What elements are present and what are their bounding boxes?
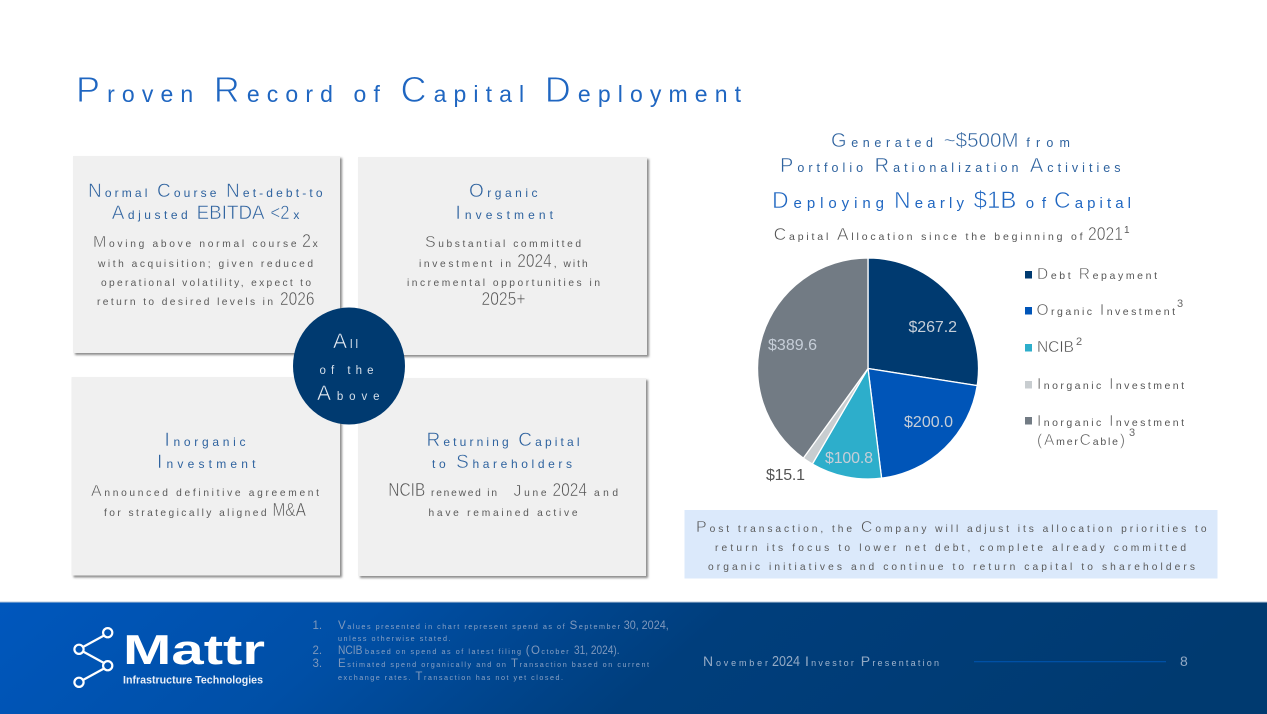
heading: returning capital: R eturning C apital	[426, 430, 580, 451]
legend: NCIB: NCIB	[1037, 339, 1074, 356]
callout: post transaction priorities: organic initiatives and continue to return capital to shareholders	[708, 562, 1195, 573]
chart title: 1	[1124, 225, 1130, 236]
text: normal course body: operational volatility, expect to	[101, 278, 311, 289]
footnotes: Estimated spend organically and on Transaction based on current	[338, 658, 649, 670]
badge: all of the above	[293, 308, 405, 424]
logo: Mattr: Mattr	[123, 626, 265, 673]
text: returning capital body: and	[594, 488, 618, 499]
slice: organic investment	[868, 368, 977, 478]
text: organic investment body	[407, 234, 600, 309]
badge: all of the above: A bove	[317, 382, 380, 405]
pie value labels: $267.2	[908, 319, 957, 336]
text: inorganic investment body: M&A	[272, 500, 306, 520]
badge: all of the above: of the	[320, 365, 374, 377]
text: returning capital body	[388, 480, 618, 519]
footnotes: NCIB	[338, 643, 362, 657]
heading: inorganic investment: I norganic	[164, 430, 246, 451]
heading: normal course	[88, 181, 323, 224]
legend: inorganic investment AmerCable: Inorganic Investment	[1037, 413, 1184, 430]
footnotes: unless otherwise stated.	[338, 634, 450, 643]
text: normal course body: M oving above normal course	[93, 234, 297, 251]
footer presentation label: 2024	[772, 654, 800, 670]
legend: inorganic investment AmerCable	[1025, 413, 1184, 449]
pie value labels: $200.0	[904, 414, 953, 431]
slice: inorganic investment	[803, 368, 868, 464]
footer presentation label: N ovember	[703, 653, 768, 669]
legend: organic investment: 3	[1177, 298, 1183, 310]
slice: debt repayment	[868, 258, 979, 386]
footer presentation label	[703, 653, 939, 670]
chart title: 2021	[1088, 224, 1123, 244]
footnotes: 2.	[312, 645, 322, 657]
heading: generated from portfolio rationalization: from	[1026, 136, 1070, 150]
logo: Mattr	[74, 626, 265, 687]
text: normal course body: x	[313, 239, 318, 250]
footnotes: 3.	[312, 658, 322, 670]
pie chart: capital allocation	[758, 258, 979, 479]
heading: returning capital	[426, 430, 580, 473]
text: inorganic investment body	[91, 483, 319, 520]
icon: network nodes	[74, 628, 112, 687]
callout: post transaction priorities	[684, 510, 1218, 578]
heading: normal course: N ormal C ourse N et-debt-to	[88, 181, 323, 202]
footnotes	[312, 618, 669, 683]
legend: inorganic investment AmerCable: (AmerCable)	[1037, 432, 1125, 449]
pie value labels: $389.6	[768, 337, 817, 354]
footnotes: 30, 2024,	[624, 618, 669, 632]
callout: post transaction priorities: return its focus to lower net debt, complete already committed	[715, 543, 1186, 554]
panel: inorganic investment	[72, 377, 340, 576]
heading: normal course: <2	[270, 203, 290, 224]
page number: 8	[1180, 653, 1188, 669]
text: returning capital body: 2024	[552, 480, 587, 500]
footnotes: 31, 2024).	[574, 643, 620, 657]
legend: NCIB: 2	[1076, 336, 1082, 348]
footnotes: exchange rates. Transaction has not yet closed.	[338, 671, 563, 683]
panel: organic investment	[358, 157, 647, 355]
text: normal course body: with acquisition; given reduced	[97, 259, 313, 270]
text: inorganic investment body: A nnounced definitive agreement	[91, 483, 319, 500]
text: organic investment body: investment in	[419, 259, 511, 270]
text: normal course body: 2	[302, 231, 311, 251]
slice: NCIB	[812, 368, 882, 479]
legend: inorganic investment: Inorganic Investment	[1037, 376, 1184, 393]
chart title: C apital A llocation since the beginning of	[774, 224, 1083, 244]
footnotes: Values presented in chart represent spend as of September	[338, 620, 621, 632]
panel: normal course leverage	[73, 156, 340, 353]
pie value labels: $15.1	[766, 467, 805, 484]
chart legend	[1025, 266, 1184, 449]
heading: deploying nearly $1B: N early	[894, 187, 964, 213]
heading: inorganic investment	[157, 430, 256, 473]
text: returning capital body: NCIB	[388, 480, 425, 500]
legend: organic investment: Organic Investment	[1036, 302, 1175, 319]
legend: inorganic investment AmerCable: 3	[1129, 427, 1135, 439]
footnotes: based on spend as of latest filing	[365, 647, 521, 656]
text: returning capital body: have remained active	[428, 508, 578, 519]
heading: inorganic investment: I nvestment	[157, 452, 256, 473]
heading: generated from portfolio rationalization: ~$500M	[944, 129, 1019, 152]
pie value labels: $100.8	[825, 450, 873, 467]
title: P roven R ecord of C apital D eployment	[76, 69, 742, 110]
text: organic investment body: S ubstantial committed	[425, 234, 581, 251]
legend: NCIB	[1025, 336, 1082, 356]
heading: organic investment	[456, 181, 554, 224]
text: normal course body: 2026	[280, 289, 314, 309]
heading: deploying nearly $1B: C apital	[1054, 187, 1131, 213]
text: organic investment body: 2025+	[482, 289, 526, 309]
heading: normal course: x	[293, 208, 299, 222]
heading: organic investment: O rganic	[469, 181, 538, 202]
footnotes: (October	[526, 645, 569, 657]
panel: returning capital	[358, 378, 646, 576]
pie value labels	[766, 319, 957, 484]
text: organic investment body: , with	[554, 259, 588, 270]
heading: generated from portfolio rationalization: P ortfolio R ationalization A ctivities	[780, 155, 1120, 177]
footnotes: 1.	[312, 620, 322, 632]
heading: deploying nearly $1B: D eploying	[772, 187, 884, 213]
footer presentation label: Investor Presentation	[805, 653, 939, 669]
heading: deploying nearly $1B: $1B	[974, 187, 1016, 214]
text: inorganic investment body: for strategically aligned	[104, 508, 267, 519]
badge: all of the above: A ll	[333, 330, 358, 353]
heading: normal course: EBITDA	[197, 203, 265, 224]
heading: returning capital: to S hareholders	[432, 452, 572, 473]
legend: debt repayment: Debt Repayment	[1037, 266, 1157, 283]
text: returning capital body: J une	[514, 483, 547, 500]
logo: Mattr: Infrastructure Technologies	[123, 674, 263, 686]
callout: post transaction priorities: P ost transaction, the C ompany will adjust its allocation priorities to	[696, 519, 1207, 536]
slice: inorganic investment AmerCable	[758, 258, 868, 458]
text: organic investment body: 2024	[517, 251, 552, 271]
heading: normal course: A djusted	[112, 203, 188, 224]
heading: deploying nearly $1B: of	[1026, 195, 1047, 212]
text: normal course body: return to desired levels in	[97, 297, 273, 308]
heading: deploying nearly $1B	[772, 187, 1131, 214]
text: returning capital body: renewed in	[431, 488, 497, 499]
text: normal course body	[93, 231, 318, 309]
heading: organic investment: I nvestment	[456, 203, 554, 224]
heading: generated from portfolio rationalization	[780, 129, 1120, 177]
heading: generated from portfolio rationalization: G enerated	[831, 130, 933, 152]
footer band	[0, 602, 1267, 714]
text: organic investment body: incremental opportunities in	[407, 278, 600, 289]
